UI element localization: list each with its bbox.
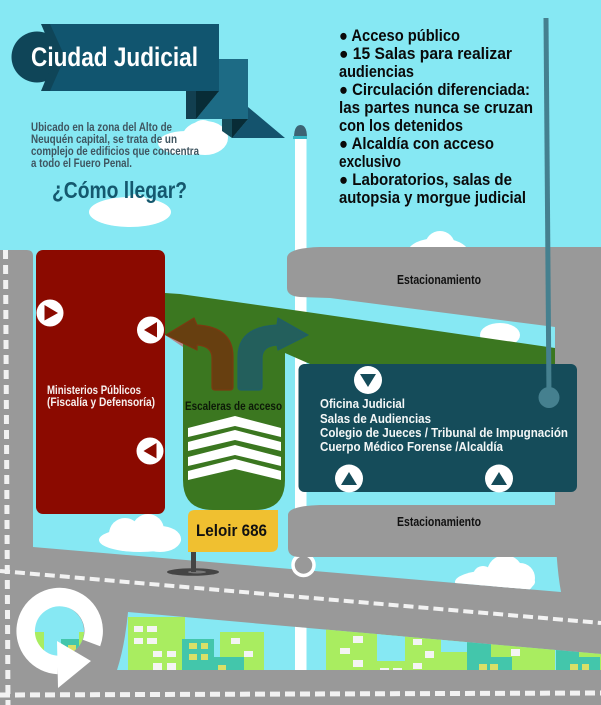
panel: Ministerios Públicos [36,250,165,514]
title: Ciudad Judicial [31,42,198,72]
marker ring [293,554,314,576]
parking top [287,247,601,327]
features list: autopsia y morgue judicial [339,189,526,207]
arrow: brown left [166,318,233,390]
intro text: complejo de edificios que concentra [31,146,200,158]
green walkway [165,293,555,510]
features list: audiencias [339,63,414,81]
features list: ● Alcaldía con acceso [339,135,494,153]
location pin line [538,18,560,408]
label: offices: Cuerpo Médico Forense /Alcaldía [320,440,504,454]
title ribbon [12,24,285,138]
features list: las partes nunca se cruzan [339,99,533,117]
label: offices: Salas de Audiencias [320,412,431,426]
label: Ministerios: (Fiscalía y Defensoría) [47,397,155,409]
icon: stairs chevrons [188,416,281,480]
label: offices: Colegio de Jueces / Tribunal de Impugnación [320,426,568,440]
road dashes [0,250,601,705]
clouds clipped by roads [99,323,535,594]
features list: ● Laboratorios, salas de [339,171,512,189]
pole with dome [293,125,307,569]
label: address: Leloir 686 [196,521,267,540]
features list: exclusivo [339,153,401,171]
label: top parking: Estacionamiento [397,273,481,287]
sky patch between roads [27,250,561,592]
sign: Leloir 686 [167,510,278,576]
intro text: Ubicado en la zona del Alto de [31,122,172,134]
heading: how to get there: ¿Cómo llegar? [52,177,187,203]
icon: right arrow circle [36,300,64,326]
arrow: teal right [238,318,308,390]
features list: con los detenidos [339,117,463,135]
intro text: a todo el Fuero Penal. [31,158,132,170]
cloud: below heading [89,194,171,227]
panel: Oficina Judicial [298,364,577,492]
features list: ● 15 Salas para realizar [339,45,513,63]
icon: up arrow circle left [335,464,363,492]
label: stairs: Escaleras de acceso [185,399,282,413]
label: bottom parking: Estacionamiento [397,515,481,529]
icon: roundabout arrow [26,597,94,688]
label: Ministerios: Ministerios Públicos [47,385,141,397]
icon: up arrow circle right [485,464,513,492]
walkway shadow [165,335,183,347]
features list: ● Acceso público [339,27,460,45]
parking bottom [288,505,601,557]
icon: down arrow circle [354,366,382,394]
cloud: behind top parking [408,231,468,266]
icon: left arrow circle lower [136,438,164,464]
icon: left arrow circle upper [137,316,164,344]
cloud: behind intro text [158,120,228,155]
road network [0,250,601,705]
label: offices: Oficina Judicial [320,397,405,411]
features list: ● Circulación diferenciada: [339,81,530,99]
intro text: Neuquén capital, se trata de un [31,134,177,146]
buildings strip [117,612,601,670]
